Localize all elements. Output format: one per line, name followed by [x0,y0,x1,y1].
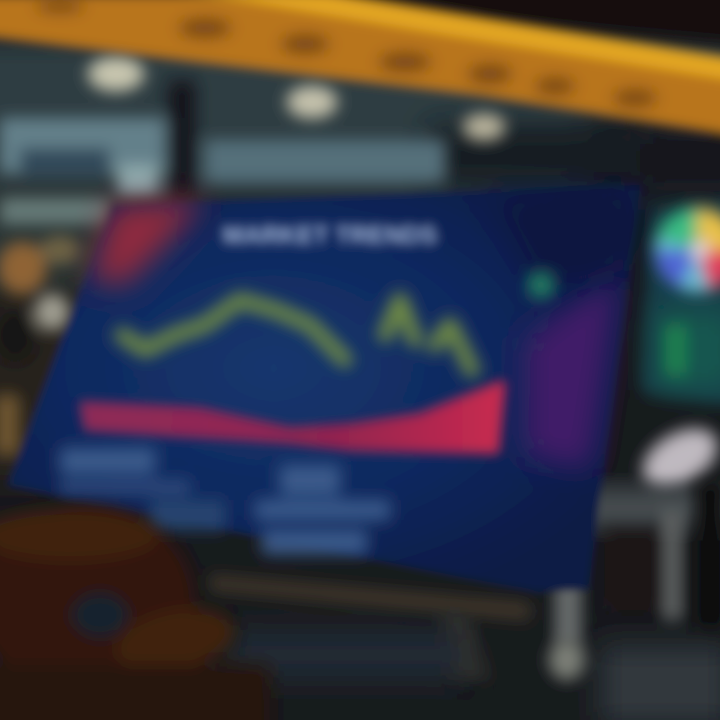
tablet marker [527,271,555,299]
tablet [8,185,640,592]
right side monitor with colour wheel [642,200,720,405]
background: warm lights at left [0,236,80,455]
top dark corner [300,0,720,45]
hand [0,505,270,720]
tablet line chart [122,300,472,370]
right side lower objects [549,417,720,720]
tablet red corner [90,200,205,285]
orange ticker banner [0,0,720,136]
icon: colour wheel [655,208,720,292]
keyboard area [230,630,460,680]
tablet screen [8,185,640,592]
background: window panels [0,80,445,224]
tablet purple edge [525,270,620,470]
tablet red area chart [80,380,505,453]
tablet title: MARKET TRENDS [223,222,437,249]
tablet bottom bezel and stand [210,575,530,680]
tablet lower text blocks [60,448,390,554]
ceiling lamps [88,57,505,140]
